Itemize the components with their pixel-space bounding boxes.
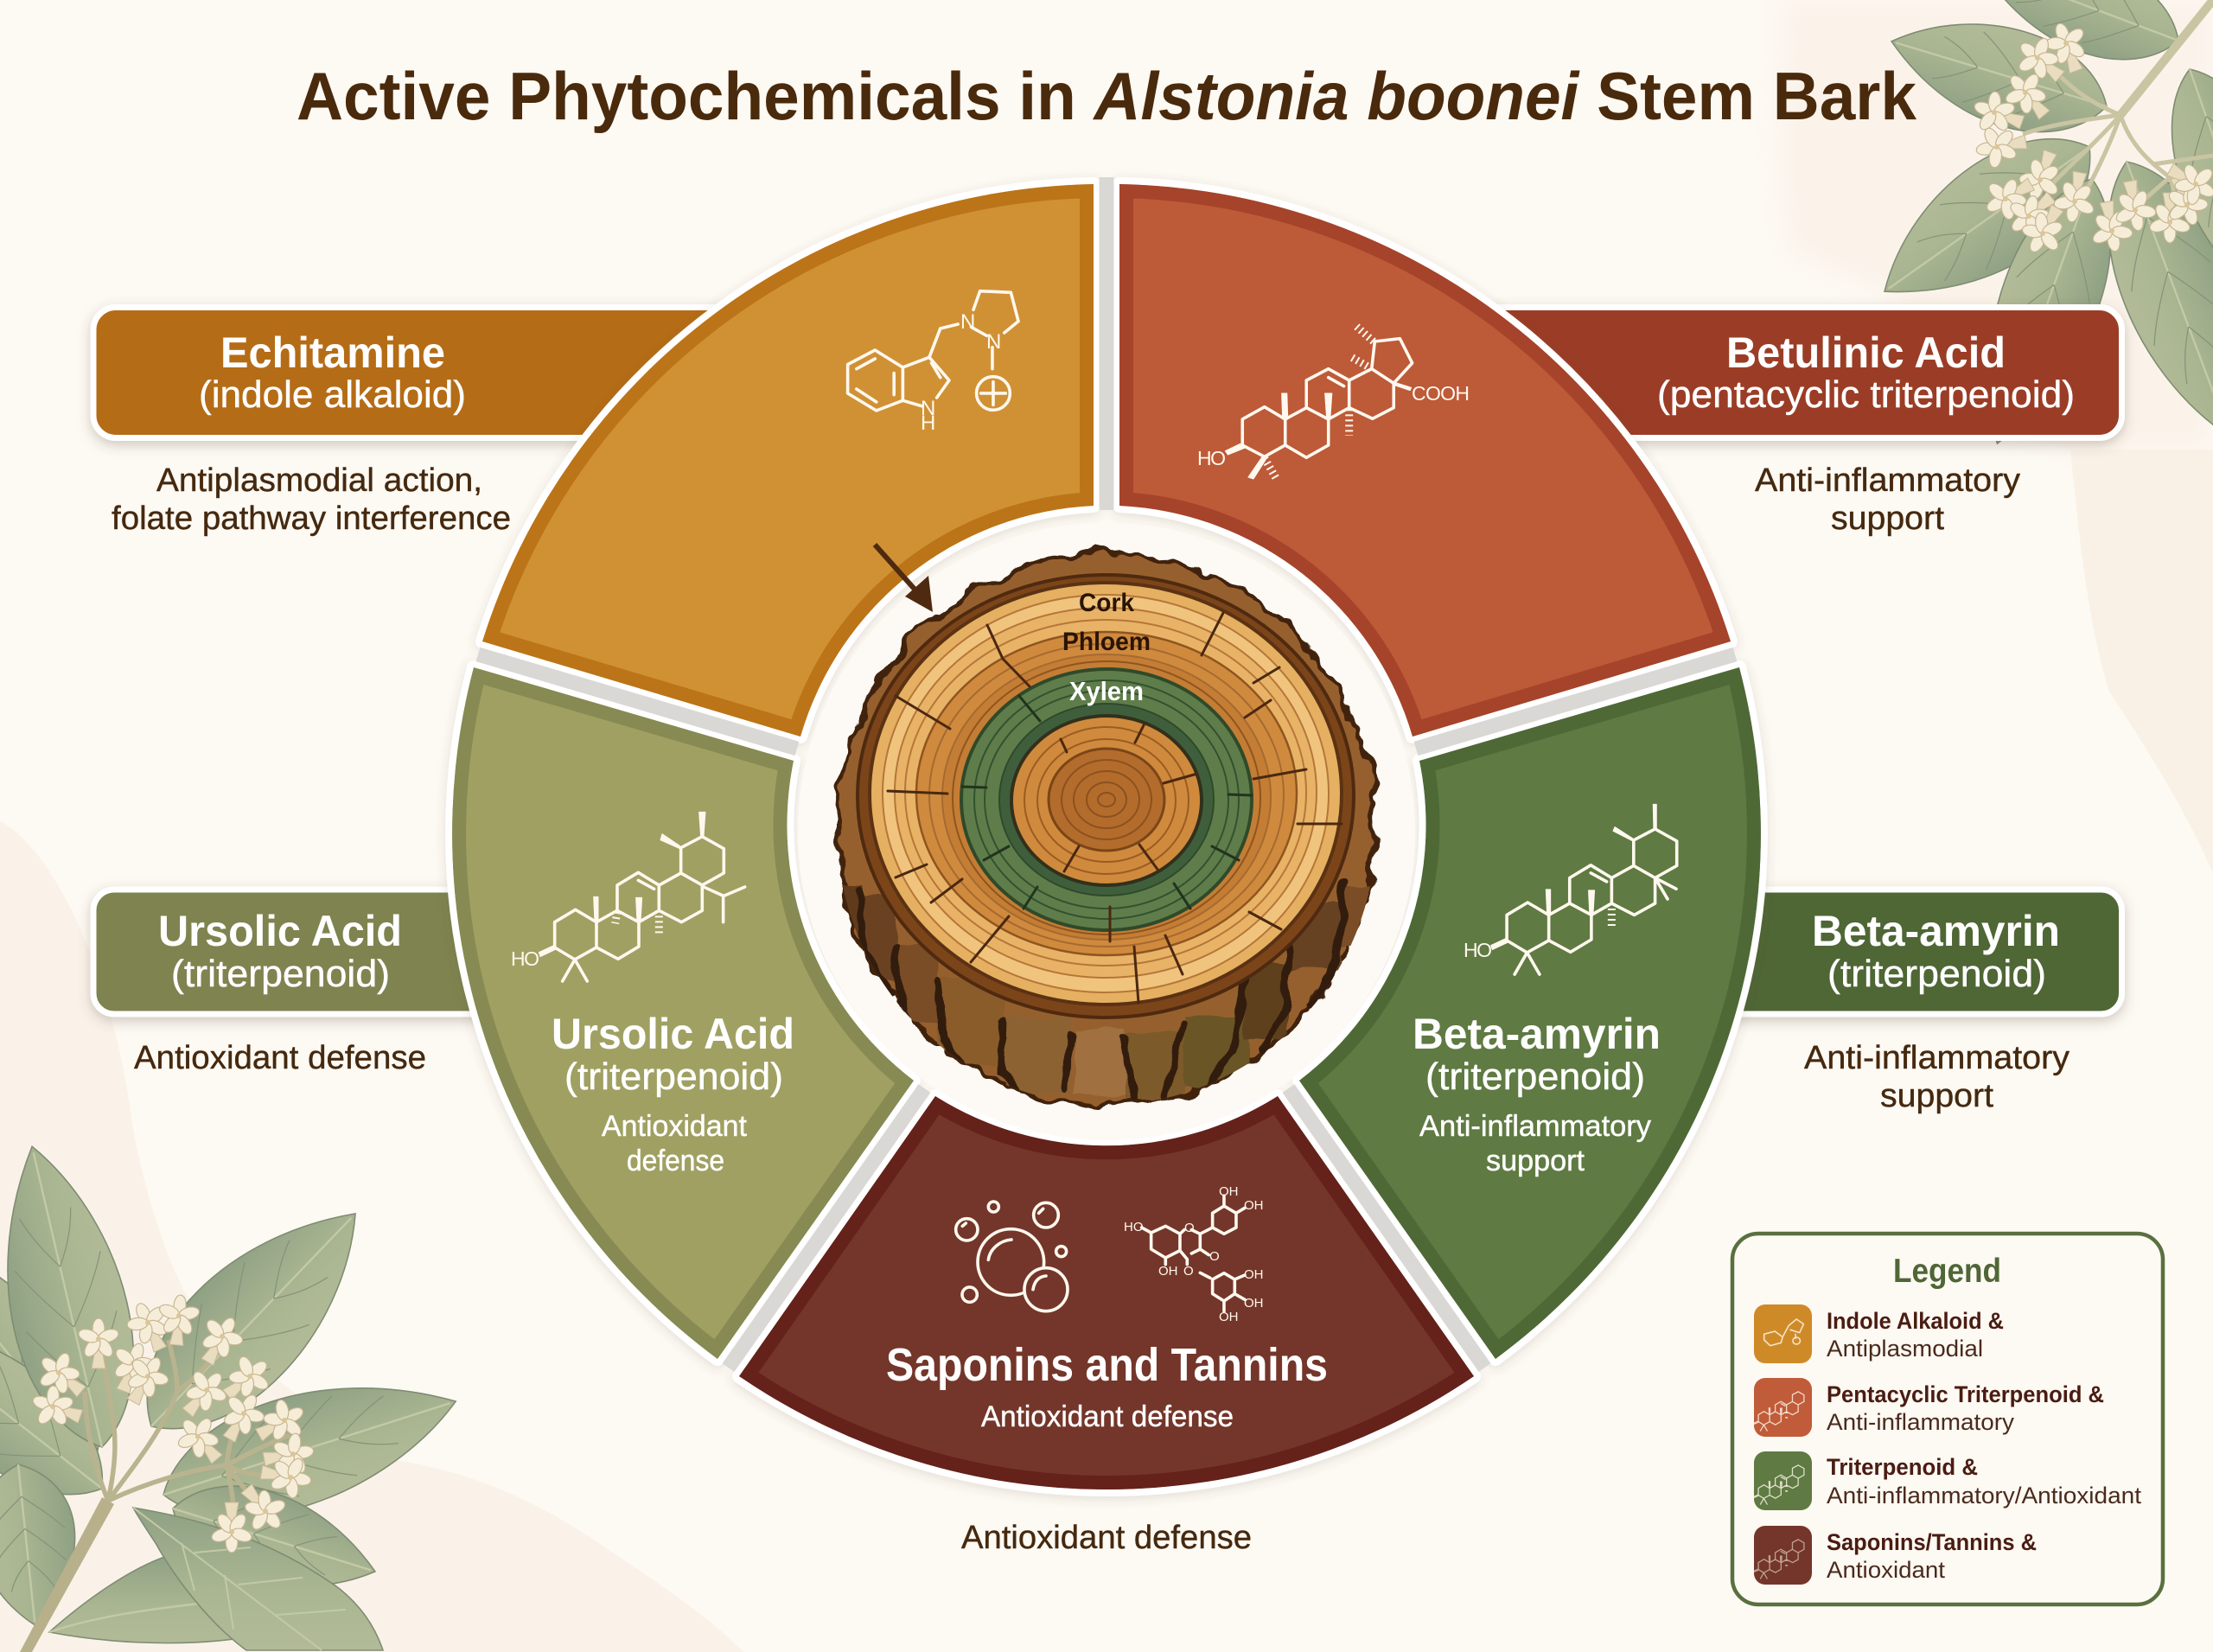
stump cross-section bbox=[837, 553, 1377, 1103]
description: Betulinic Acid bbox=[1755, 462, 2020, 537]
molecule atom labels: O bbox=[1184, 1221, 1195, 1235]
molecule atom labels: O bbox=[1183, 1264, 1194, 1279]
legend item: indole alkaloid: Antiplasmodial bbox=[1827, 1336, 1983, 1362]
molecule atom labels bbox=[1197, 382, 1470, 469]
description: Betulinic Acid: Anti-inflammatory bbox=[1755, 462, 2020, 499]
text: Saponins and Tannins segment bbox=[886, 1339, 1328, 1433]
label bar: Betulinic Acid: (pentacyclic triterpenoid) bbox=[1657, 373, 2075, 416]
legend item: indole alkaloid bbox=[1754, 1304, 2004, 1363]
legend item: pentacyclic triterpenoid: Anti-inflammatory bbox=[1827, 1409, 2015, 1435]
legend item: indole alkaloid: Indole Alkaloid & bbox=[1827, 1308, 2004, 1334]
legend item: pentacyclic triterpenoid: Pentacyclic Triterpenoid & bbox=[1827, 1381, 2104, 1407]
text: Saponins and Tannins segment: Antioxidant defense bbox=[981, 1400, 1234, 1433]
description: Beta-amyrin bbox=[1804, 1040, 2070, 1114]
legend item: triterpenoid: Anti-inflammatory/Antioxidant bbox=[1827, 1483, 2142, 1508]
legend bbox=[1732, 1234, 2163, 1604]
molecule atom labels: OH bbox=[1244, 1296, 1264, 1311]
label bar: Echitamine: Echitamine bbox=[220, 328, 445, 377]
molecule atom labels: N bbox=[986, 330, 1001, 354]
description: Beta-amyrin: Anti-inflammatory bbox=[1804, 1040, 2070, 1076]
text: Ursolic Acid segment: Antioxidant bbox=[602, 1110, 748, 1143]
legend item: saponins and tannins: Saponins/Tannins & bbox=[1827, 1529, 2037, 1555]
panel: Echitamine segment bbox=[482, 184, 1094, 737]
text: Beta-amyrin segment: (triterpenoid) bbox=[1425, 1056, 1645, 1098]
radial cracks bbox=[888, 613, 1342, 1003]
molecule atom labels: OH bbox=[1219, 1310, 1238, 1324]
text: Ursolic Acid segment: Ursolic Acid bbox=[552, 1010, 794, 1058]
molecule atom labels: OH bbox=[1158, 1264, 1177, 1279]
label bar: Betulinic Acid bbox=[1435, 308, 2121, 437]
dark rim bbox=[858, 575, 1354, 1017]
molecule atom labels: OH bbox=[1244, 1267, 1264, 1282]
icon: beta-amyrin molecule bbox=[1491, 804, 1677, 974]
label bar: Beta-amyrin: (triterpenoid) bbox=[1827, 953, 2046, 995]
description: Ursolic Acid: Antioxidant defense bbox=[134, 1040, 426, 1076]
label bar: Betulinic Acid: Betulinic Acid bbox=[1726, 328, 2006, 377]
icon: saponin bubbles bbox=[956, 1202, 1068, 1311]
molecule atom labels bbox=[921, 310, 1001, 435]
label bar: Echitamine: (indole alkaloid) bbox=[199, 373, 466, 416]
label bar: Ursolic Acid: Ursolic Acid bbox=[158, 907, 402, 955]
legend item: pentacyclic triterpenoid bbox=[1754, 1378, 2104, 1437]
description: Echitamine bbox=[112, 462, 511, 537]
phloem rings bbox=[916, 632, 1297, 955]
description: Beta-amyrin: support bbox=[1880, 1078, 1993, 1114]
molecule atom labels: OH bbox=[1244, 1198, 1264, 1213]
centre clearing bbox=[798, 523, 1415, 1140]
molecule atom labels: HO bbox=[1124, 1220, 1143, 1234]
legend title: Legend bbox=[1893, 1253, 2001, 1290]
label bar: Beta-amyrin bbox=[1591, 890, 2121, 1014]
icon: ursolic acid molecule bbox=[539, 812, 745, 981]
panel: Beta-amyrin segment bbox=[1299, 667, 1761, 1359]
molecule atom labels: OH bbox=[1219, 1184, 1238, 1199]
molecule atom label: HO bbox=[511, 947, 539, 970]
xylem rings bbox=[961, 669, 1252, 930]
inner wood rings bbox=[1011, 716, 1202, 885]
text: Ursolic Acid segment: defense bbox=[627, 1145, 724, 1177]
text: Saponins and Tannins segment: Saponins and Tannins bbox=[886, 1339, 1328, 1391]
description: Saponins and Tannins: Antioxidant defense bbox=[961, 1520, 1252, 1556]
icon: tannin molecule bbox=[1142, 1196, 1245, 1311]
panel: Ursolic Acid segment bbox=[452, 667, 914, 1359]
text: Beta-amyrin segment: support bbox=[1486, 1145, 1585, 1177]
label bar: Beta-amyrin: Beta-amyrin bbox=[1812, 907, 2060, 955]
text: Beta-amyrin segment: Anti-inflammatory bbox=[1419, 1110, 1651, 1143]
description: Betulinic Acid: support bbox=[1831, 501, 1944, 537]
label bar: Echitamine bbox=[93, 308, 785, 437]
molecule atom labels: O bbox=[1209, 1249, 1220, 1264]
legend item: saponins and tannins: Antioxidant bbox=[1827, 1557, 1946, 1583]
panel: Saponins and Tannins segment bbox=[739, 1096, 1474, 1489]
title: Active Phytochemicals in Alstonia boonei Stem Bark bbox=[297, 58, 1917, 134]
sapwood rings bbox=[870, 583, 1342, 1005]
stump bark side bbox=[837, 553, 1377, 1103]
legend item: saponins and tannins bbox=[1754, 1526, 2037, 1585]
molecule atom labels: COOH bbox=[1412, 382, 1470, 405]
label: Phloem: Phloem bbox=[1062, 628, 1151, 656]
label: Xylem: Xylem bbox=[1069, 676, 1144, 706]
label bar: Ursolic Acid bbox=[93, 890, 629, 1014]
text: Ursolic Acid segment bbox=[552, 1010, 794, 1177]
description: Echitamine: Antiplasmodial action, bbox=[156, 462, 482, 499]
molecule atom labels: N bbox=[960, 310, 975, 334]
panel: Betulinic Acid segment bbox=[1119, 184, 1731, 737]
arrow: pointing to cork bbox=[875, 545, 933, 612]
text: Beta-amyrin segment bbox=[1413, 1010, 1661, 1177]
text: Beta-amyrin segment: Beta-amyrin bbox=[1413, 1010, 1661, 1058]
molecule atom label: HO bbox=[1464, 939, 1492, 961]
description: Echitamine: folate pathway interference bbox=[112, 501, 511, 537]
wheel white backing bbox=[452, 184, 1761, 1489]
label: Cork: Cork bbox=[1079, 589, 1134, 617]
molecule atom labels: N bbox=[921, 397, 935, 420]
legend item: triterpenoid: Triterpenoid & bbox=[1827, 1454, 1978, 1480]
botanical: bottom left sprig bbox=[0, 1133, 472, 1652]
label bar: Ursolic Acid: (triterpenoid) bbox=[171, 953, 390, 995]
text: Ursolic Acid segment: (triterpenoid) bbox=[564, 1056, 783, 1098]
icon: betulinic acid molecule bbox=[1225, 324, 1413, 479]
molecule atom labels: H bbox=[921, 411, 935, 435]
molecule atom labels: HO bbox=[1197, 447, 1226, 469]
botanical: top right sprig bbox=[1854, 0, 2213, 460]
molecule atom labels bbox=[1124, 1184, 1264, 1324]
icon: echitamine molecule bbox=[848, 291, 1018, 411]
legend item: triterpenoid bbox=[1754, 1451, 2142, 1510]
